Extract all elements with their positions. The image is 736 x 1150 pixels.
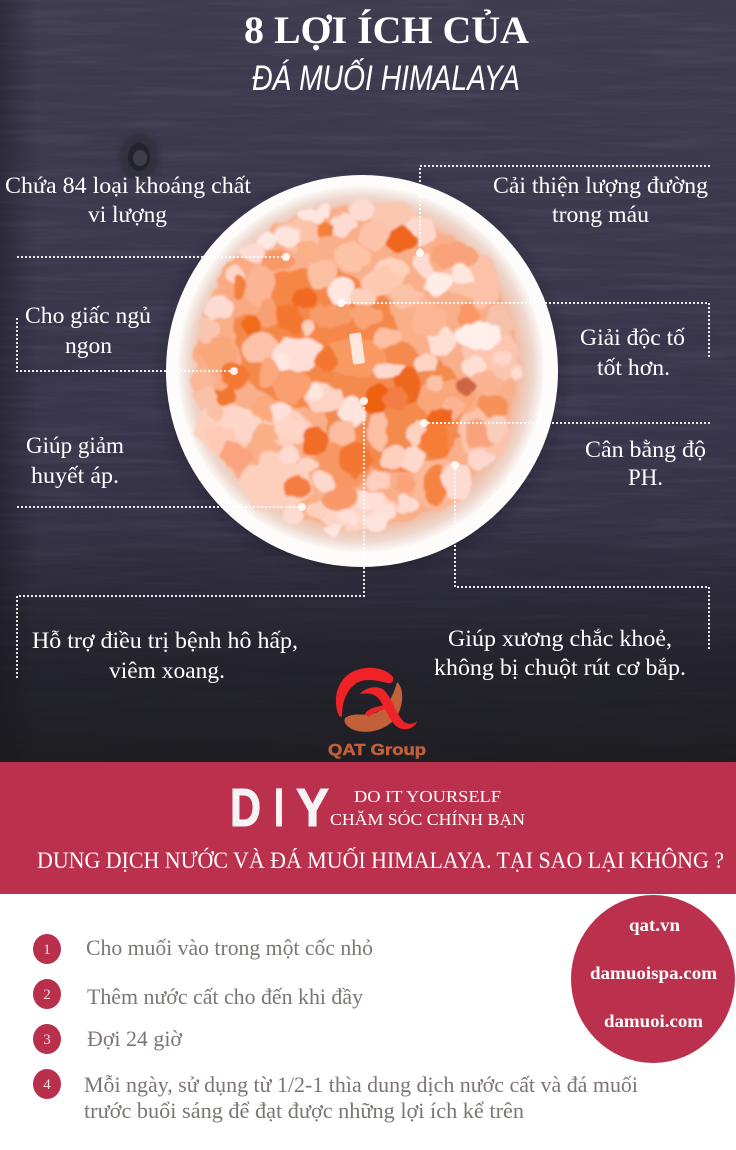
badge: websites: qat.vn	[629, 915, 680, 935]
step 3: 3	[43, 1032, 51, 1048]
benefit: minerals: Chứa 84 loại khoáng chất	[5, 173, 252, 198]
logo: QAT Group: QAT Group	[328, 742, 426, 759]
benefit: respiratory	[32, 628, 298, 683]
benefit: pH balance	[585, 437, 706, 490]
step 1: 1	[43, 942, 51, 958]
step 2	[33, 979, 363, 1009]
benefit: respiratory: Hỗ trợ điều trị bệnh hô hấp,	[32, 628, 298, 653]
benefit: bones: không bị chuột rút cơ bắp.	[434, 655, 686, 680]
logo: QAT Group	[328, 668, 426, 759]
benefit: detox: Giải độc tố	[580, 325, 686, 350]
benefit: blood pressure	[26, 433, 124, 488]
DIY subtitle: CHĂM SÓC CHÍNH BẠN	[330, 810, 525, 829]
bowl of pink Himalayan salt	[165, 175, 559, 571]
benefit: minerals: vi lượng	[88, 202, 167, 227]
benefit: blood pressure: Giúp giảm	[26, 433, 124, 458]
benefit: bones: Giúp xương chắc khoẻ,	[448, 626, 672, 651]
DIY subtitle: DO IT YOURSELF	[354, 787, 501, 806]
connector: Giải độc tố	[337, 299, 709, 358]
DIY heading: D	[230, 778, 261, 838]
step 3: Đợi 24 giờ	[87, 1026, 182, 1051]
connector: Chứa 84 loại khoáng chất	[17, 253, 290, 261]
step 1	[33, 934, 373, 964]
step 4: 4	[43, 1077, 51, 1093]
subtitle: ĐÁ MUỐI HIMALAYA	[252, 58, 520, 98]
DIY heading	[230, 778, 329, 838]
panel: DIY banner	[0, 762, 736, 894]
benefit: bones	[434, 626, 686, 680]
panel: instructions	[0, 894, 736, 1150]
benefit: blood pressure: huyết áp.	[31, 463, 119, 488]
step 4	[33, 1069, 638, 1123]
step 4: Mỗi ngày, sử dụng từ 1/2-1 thìa dung dịch nước cất và đá muối	[84, 1072, 638, 1097]
panel: dark wood background	[0, 0, 736, 763]
benefit: blood sugar	[493, 173, 709, 227]
benefit: pH balance: Cân bằng độ	[585, 437, 706, 462]
badge: websites: damuoispa.com	[590, 963, 717, 983]
connector: Cải thiện lượng đường	[416, 166, 710, 257]
step 1: Cho muối vào trong một cốc nhỏ	[86, 935, 373, 960]
step 3	[33, 1024, 182, 1054]
benefit: detox	[580, 325, 686, 380]
badge: websites	[571, 895, 735, 1063]
benefit: detox: tốt hơn.	[597, 355, 670, 380]
title: 8 LỢI ÍCH CỦA	[244, 8, 529, 52]
connector: Cân bằng độ PH	[420, 419, 710, 427]
benefit: sleep: ngon	[65, 333, 113, 358]
benefit: sleep: Cho giấc ngủ	[25, 303, 152, 328]
badge: websites: damuoi.com	[604, 1011, 703, 1031]
benefit: sleep	[25, 303, 152, 358]
connector: Hỗ trợ điều trị	[17, 397, 368, 678]
benefit: blood sugar: Cải thiện lượng đường	[493, 173, 709, 198]
step 2: 2	[43, 987, 51, 1003]
DIY subtitle	[330, 787, 525, 829]
benefit: respiratory: viêm xoang.	[109, 658, 225, 683]
connector: Giúp giảm huyết áp	[17, 503, 306, 511]
benefit: minerals	[5, 173, 252, 227]
benefit: pH balance: PH.	[628, 465, 663, 490]
connector: Giúp xương chắc khoẻ	[451, 461, 709, 649]
connector: Cho giấc ngủ ngon	[17, 318, 238, 375]
benefit: blood sugar: trong máu	[552, 202, 650, 227]
step 2: Thêm nước cất cho đến khi đầy	[87, 984, 363, 1009]
DIY heading: Y	[296, 778, 329, 838]
DIY heading: I	[274, 778, 284, 838]
step 4: trước buổi sáng để đạt được những lợi ích kể trên	[84, 1098, 524, 1123]
